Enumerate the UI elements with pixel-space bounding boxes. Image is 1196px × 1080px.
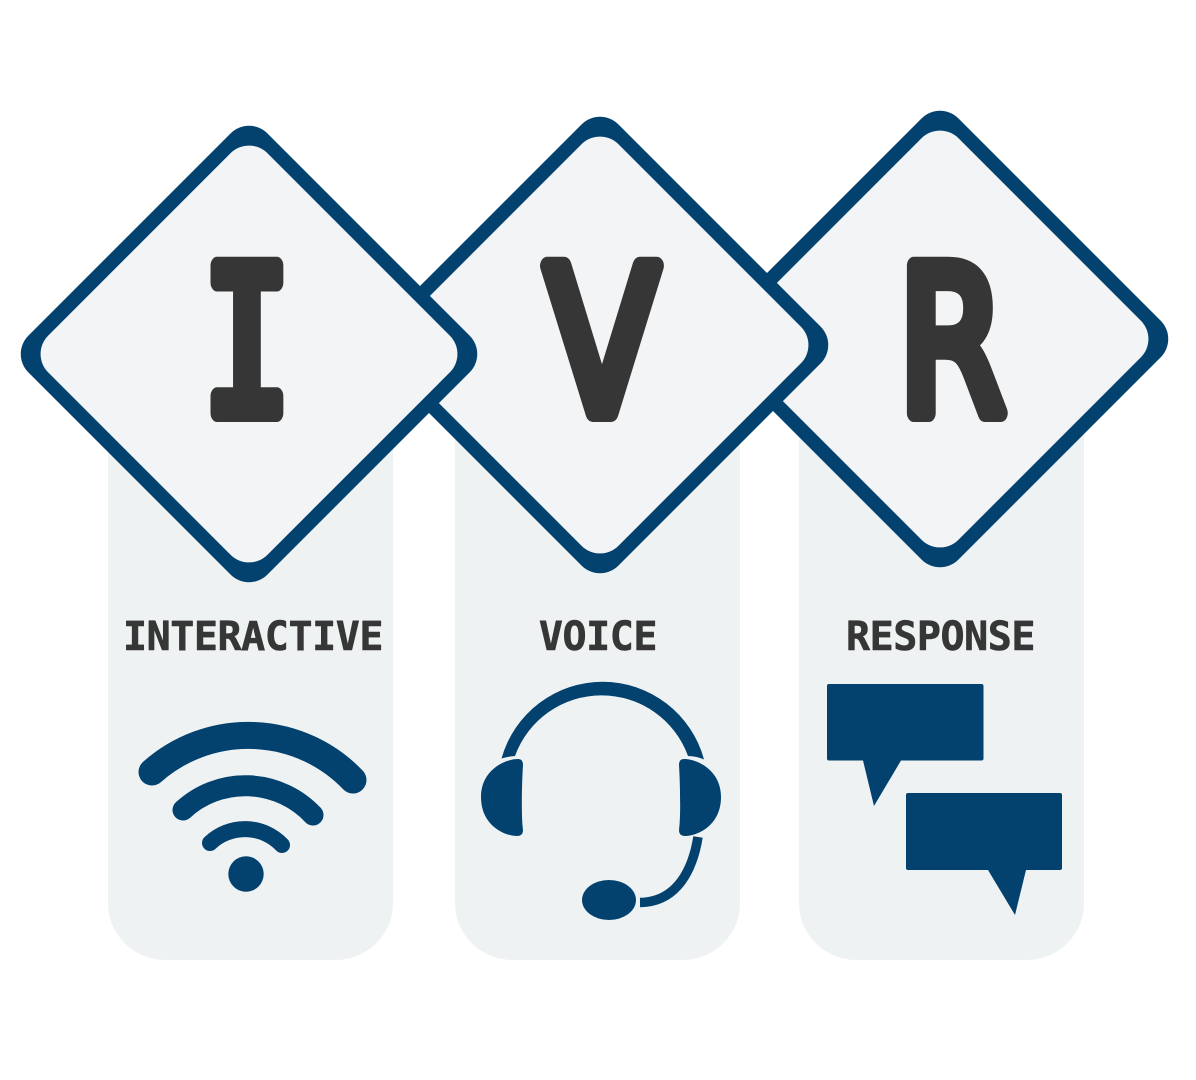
diamond: letter V xyxy=(361,106,839,584)
diamond: letter R: R xyxy=(899,226,1005,461)
heading: response: RESPONSE xyxy=(846,614,1035,660)
icon: wifi signal xyxy=(152,735,353,892)
panel: voice background xyxy=(455,350,740,960)
icon: headset xyxy=(481,682,721,920)
diamond: letter I xyxy=(10,115,488,593)
diamond: letter V: V xyxy=(546,226,658,461)
heading: interactive: INTERACTIVE xyxy=(123,614,383,660)
icon: speech bubbles xyxy=(827,684,1062,915)
panel: response background xyxy=(799,350,1084,960)
panel: interactive background xyxy=(108,350,393,960)
heading: voice: VOICE xyxy=(539,614,657,660)
diamond: letter I: I xyxy=(203,226,291,461)
diamond: letter R xyxy=(701,100,1179,578)
